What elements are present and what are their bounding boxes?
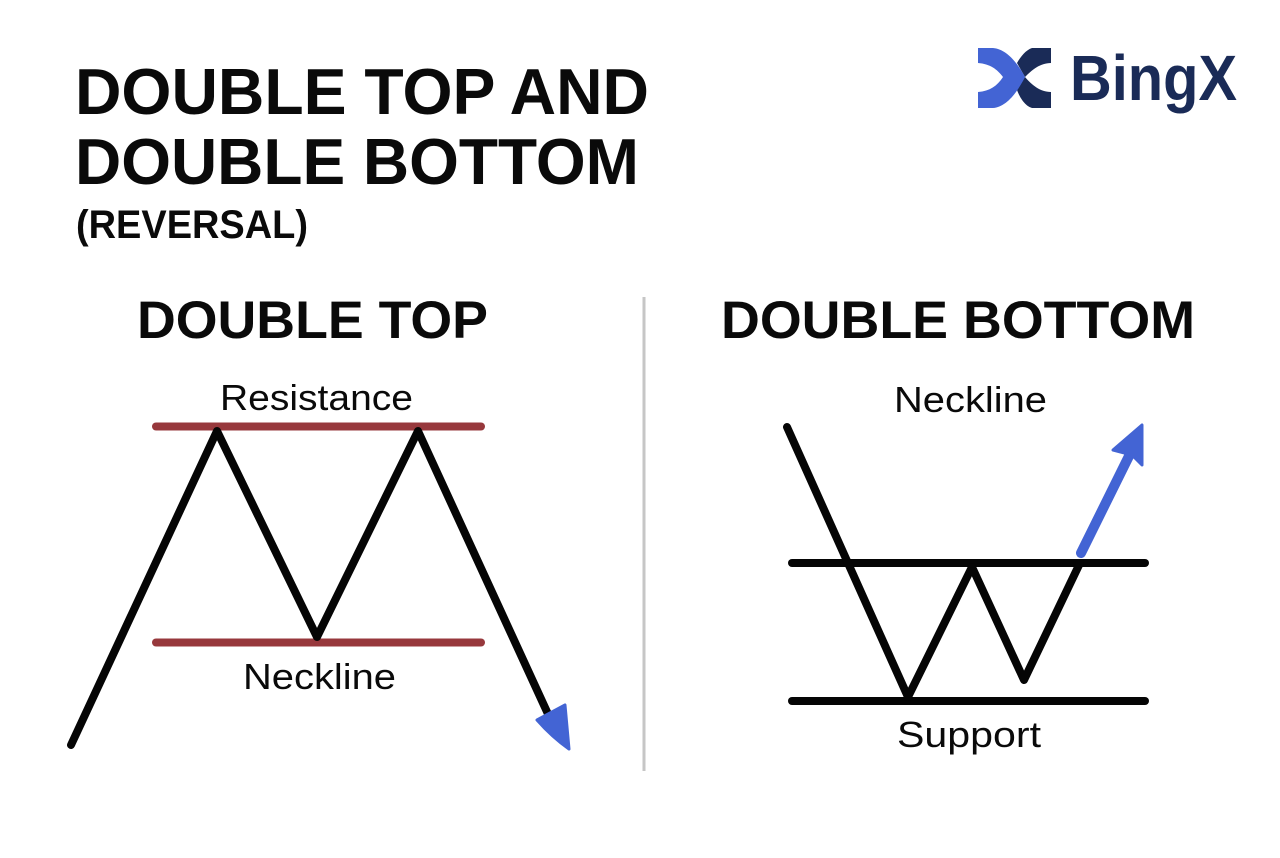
price line: W pattern: [787, 427, 1080, 697]
neckline line: [792, 559, 1145, 567]
price line: M pattern: [71, 431, 548, 745]
heading: double top: DOUBLE TOP: [137, 291, 488, 350]
neckline line: [156, 638, 481, 646]
title: DOUBLE TOP AND: [75, 56, 649, 128]
divider: [642, 297, 646, 771]
arrow: down: [537, 705, 569, 749]
panel: double top: [71, 291, 569, 749]
resistance line: [156, 422, 481, 430]
label: neckline: Neckline: [243, 656, 396, 697]
panel: double bottom: [721, 291, 1195, 755]
title: DOUBLE BOTTOM: [75, 126, 639, 198]
support line: [792, 697, 1145, 705]
label: neckline: Neckline: [894, 379, 1047, 420]
logo: BingX: [978, 42, 1237, 114]
subtitle: (REVERSAL): [76, 203, 308, 247]
logo: BingX: BingX: [1070, 42, 1237, 114]
label: support: Support: [897, 714, 1041, 755]
label: resistance: Resistance: [220, 377, 413, 418]
arrow: up: [1081, 425, 1142, 553]
title: [75, 56, 649, 198]
heading: double bottom: DOUBLE BOTTOM: [721, 291, 1195, 350]
